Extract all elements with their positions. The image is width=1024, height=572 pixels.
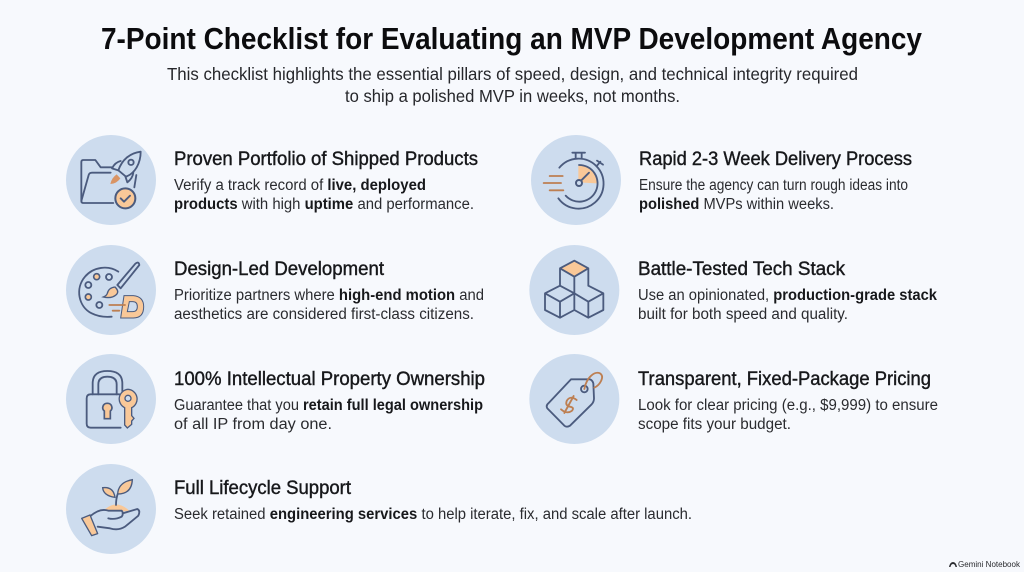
subtitle: This checklist highlights the essential pillars of speed, design, and technical integrity required <box>167 64 858 84</box>
icon: stacked cubes <box>529 245 619 335</box>
panel: IP ownership <box>66 354 485 444</box>
description: scope fits your budget. <box>638 416 791 433</box>
icon: stopwatch <box>531 135 621 225</box>
icon: hand holding sprout <box>66 464 156 554</box>
heading: Full Lifecycle Support <box>174 478 352 499</box>
description <box>639 177 908 213</box>
heading: Design-Led Development <box>174 259 385 280</box>
description: aesthetics are considered first-class citizens. <box>174 306 474 323</box>
heading: 100% Intellectual Property Ownership <box>174 369 485 390</box>
description: products with high uptime and performance. <box>174 196 474 213</box>
heading: Transparent, Fixed-Package Pricing <box>638 369 931 390</box>
description <box>174 287 484 323</box>
icon: palette and brush <box>66 245 156 335</box>
description: Guarantee that you retain full legal ownership <box>174 397 483 414</box>
panel: design-led development <box>66 245 484 335</box>
description: Look for clear pricing (e.g., $9,999) to ensure <box>638 397 938 414</box>
panel: fixed-package pricing <box>529 354 938 444</box>
description: Ensure the agency can turn rough ideas into <box>639 177 908 194</box>
description: Use an opinionated, production-grade stack <box>638 287 937 304</box>
icon: padlock and key <box>66 354 156 444</box>
title: 7-Point Checklist for Evaluating an MVP Development Agency <box>101 22 922 56</box>
subtitle: to ship a polished MVP in weeks, not months. <box>345 86 680 106</box>
panel: tech stack <box>529 245 937 335</box>
description: of all IP from day one. <box>174 416 332 433</box>
subtitle <box>167 64 858 106</box>
description <box>638 397 938 433</box>
watermark: Gemini Notebook: Gemini Notebook <box>958 559 1021 569</box>
panel: rapid delivery <box>531 135 912 225</box>
description: Verify a track record of live, deployed <box>174 177 426 194</box>
description <box>174 397 483 433</box>
heading: Proven Portfolio of Shipped Products <box>174 149 478 170</box>
heading: Rapid 2-3 Week Delivery Process <box>639 149 912 170</box>
icon: folder, rocket and check <box>66 135 156 225</box>
icon: price tag <box>529 354 619 444</box>
description: Seek retained engineering services to help iterate, fix, and scale after launch. <box>174 506 692 523</box>
panel: lifecycle support <box>66 464 692 554</box>
description <box>174 177 474 213</box>
description: built for both speed and quality. <box>638 306 848 323</box>
description: Prioritize partners where high-end motion and <box>174 287 484 304</box>
description: polished MVPs within weeks. <box>639 196 834 213</box>
panel: proven portfolio <box>66 135 478 225</box>
description <box>638 287 937 323</box>
heading: Battle-Tested Tech Stack <box>638 259 845 280</box>
